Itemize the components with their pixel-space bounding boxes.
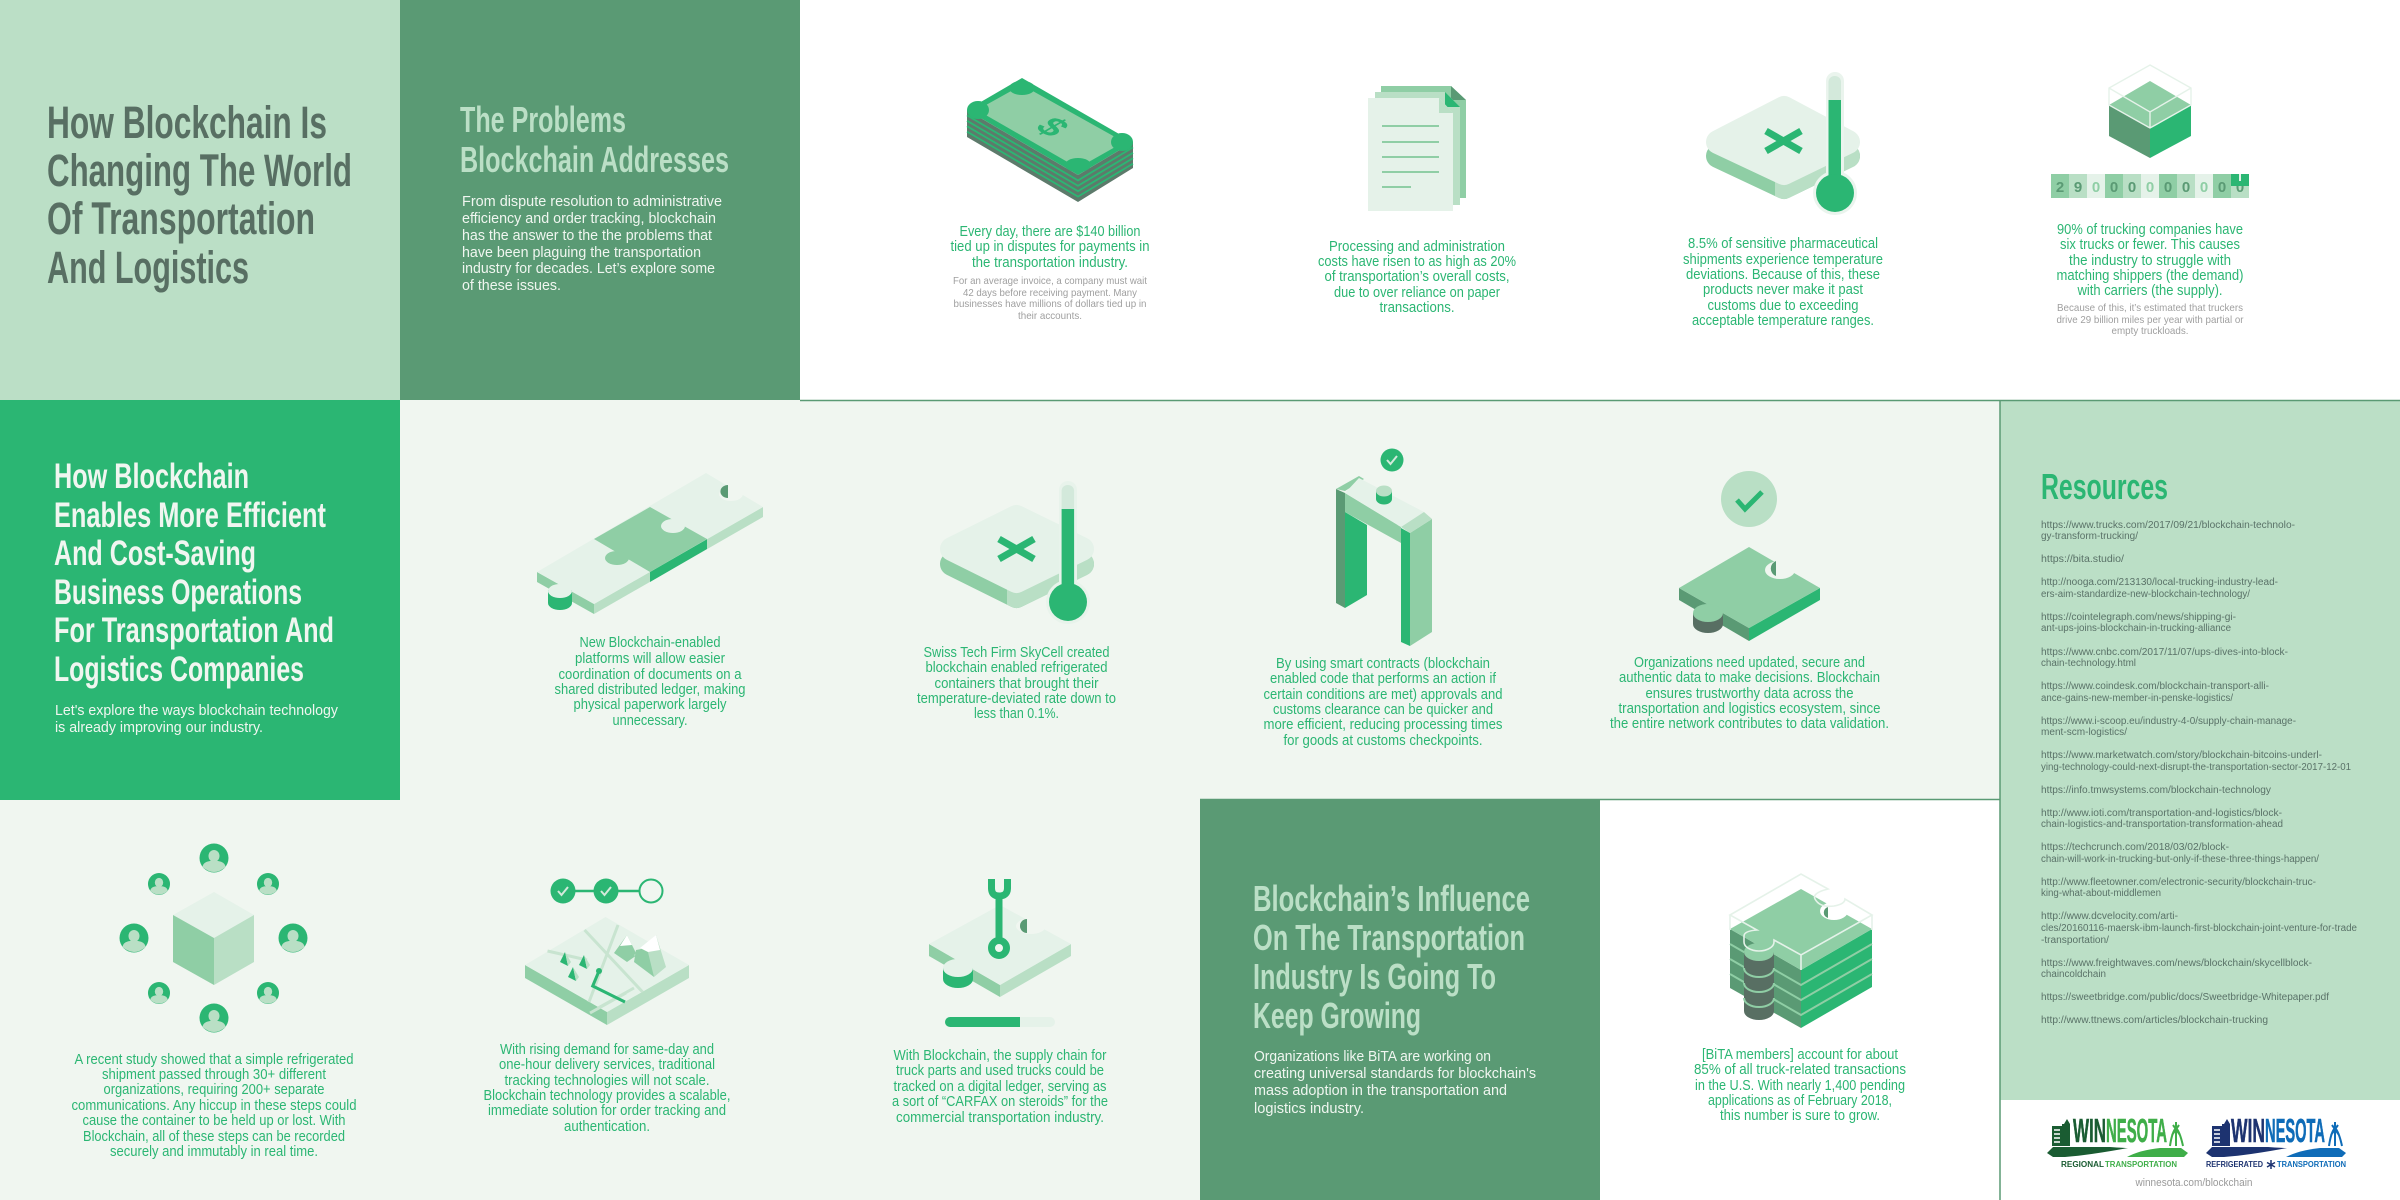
heading: how blockchain enables bbox=[54, 457, 334, 689]
logo: winnesota refrigerated transportation bbox=[2206, 1112, 2346, 1169]
text: explore the ways: is already improving our industry. bbox=[55, 719, 263, 736]
text: small trucking companies: empty truckloads. bbox=[2112, 325, 2188, 337]
text: problems intro bbox=[462, 193, 722, 294]
text: pharmaceutical shipments: customs due to exceeding bbox=[1708, 298, 1858, 314]
icon: delivery map with progress steps bbox=[525, 878, 689, 1025]
icon: thermometer on rejected tile bbox=[1718, 72, 1857, 215]
icon: cube surrounded by people bbox=[120, 844, 308, 1032]
text: carfax on steroids: a sort of “CARFAX on steroids” for the bbox=[892, 1094, 1108, 1110]
text: disputes: 42 days before receiving payment. Many bbox=[963, 287, 1138, 299]
icon: mile counter: 0 bbox=[2182, 179, 2190, 196]
list: resource links: ers-aim-standardize-new-blockchain-technology/ bbox=[2041, 589, 2250, 600]
list: resource links: ment-scm-logistics/ bbox=[2041, 727, 2127, 738]
logo: winnesota regional transportation: NESOTA bbox=[2106, 1112, 2167, 1149]
text: shared ledger: unnecessary. bbox=[612, 713, 688, 729]
text: carfax on steroids: truck parts and used trucks could be bbox=[896, 1063, 1104, 1079]
text: skycell: Swiss Tech Firm SkyCell created bbox=[924, 645, 1110, 661]
list: resource links: https://sweetbridge.com/public/docs/Sweetbridge-Whitepaper.pdf bbox=[2041, 992, 2329, 1003]
text: disputes: their accounts. bbox=[1018, 310, 1082, 322]
text: smart contracts: more efficient, reducing processing times bbox=[1264, 717, 1502, 733]
heading: influence: Keep Growing bbox=[1253, 995, 1421, 1036]
text: problems intro: have been plaguing the transportation bbox=[462, 244, 701, 261]
icon: mile counter: 0 bbox=[2146, 179, 2154, 196]
text: bita members: this number is sure to grow. bbox=[1720, 1108, 1880, 1124]
text: refrigerated shipment study: cause the container to be held up or lost. With bbox=[82, 1113, 346, 1129]
icon: customs gate with check bbox=[1336, 448, 1432, 646]
text: problems intro: efficiency and order tracking, blockchain bbox=[462, 210, 716, 227]
heading: influence: Blockchain’s Influence bbox=[1253, 878, 1530, 919]
text: trustworthy data: ensures trustworthy data across the bbox=[1646, 686, 1854, 702]
text: bita members: in the U.S. With nearly 1,400 pending bbox=[1695, 1078, 1905, 1094]
text: paper costs: costs have risen to as high as 20% bbox=[1318, 254, 1516, 270]
list: resource links: ance-gains-new-member-in-penske-logistics/ bbox=[2041, 693, 2233, 704]
icon: mile counter: 0 bbox=[2200, 179, 2208, 196]
text: smart contracts: enabled code that performs an action if bbox=[1270, 671, 1497, 687]
text: paper costs: of transportation’s overall costs, bbox=[1324, 269, 1510, 285]
title: Of Transportation bbox=[47, 193, 315, 244]
text: influence body: creating universal standards for blockchain's bbox=[1254, 1065, 1536, 1082]
text: disputes: the transportation industry. bbox=[972, 255, 1128, 271]
text: delivery tracking: immediate solution for order tracking and bbox=[488, 1103, 726, 1119]
text: pharmaceutical shipments: deviations. Because of this, these bbox=[1686, 267, 1880, 283]
list: resource links: https://www.trucks.com/2017/09/21/blockchain-technolo- bbox=[2041, 520, 2295, 531]
heading: how blockchain enables: For Transportation And bbox=[54, 611, 334, 650]
panel: the problems intro bbox=[400, 0, 800, 400]
text: trustworthy data: authentic data to make decisions. Blockchain bbox=[1619, 670, 1880, 686]
icon: mile counter: 0 bbox=[2092, 179, 2100, 196]
text: disputes: tied up in disputes for payments in bbox=[950, 239, 1150, 255]
icon: stack of money: $ bbox=[1026, 112, 1079, 142]
text: trustworthy data: Organizations need updated, secure and bbox=[1634, 655, 1865, 671]
text: skycell: temperature-deviated rate down to bbox=[917, 691, 1116, 707]
text: trustworthy data bbox=[1610, 655, 1889, 732]
list: resource links: cles/20160116-maersk-ibm-launch-first-blockchain-joint-venture-for-trade bbox=[2041, 923, 2357, 934]
list: resource links: http://www.ioti.com/transportation-and-logistics/block- bbox=[2041, 808, 2282, 819]
text: explore the ways: Let's explore the ways blockchain technology bbox=[55, 702, 338, 719]
list: resource links: http://www.ttnews.com/articles/blockchain-trucking bbox=[2041, 1015, 2268, 1026]
icon: mile counter: 2 bbox=[2056, 179, 2064, 196]
text: delivery tracking: one-hour delivery services, traditional bbox=[499, 1057, 715, 1073]
list: resource links bbox=[2041, 520, 2357, 1026]
icon: three-piece puzzle strip bbox=[537, 473, 763, 614]
text: skycell: blockchain enabled refrigerated bbox=[926, 660, 1108, 676]
text: website url: winnesota.com/blockchain bbox=[2135, 1177, 2252, 1189]
text: delivery tracking: Blockchain technology provides a scalable, bbox=[484, 1088, 730, 1104]
text: smart contracts: customs clearance can be quicker and bbox=[1273, 702, 1493, 718]
logo: winnesota regional transportation: TRANSPORTATION bbox=[2105, 1160, 2177, 1169]
list: resource links: chain-technology.html bbox=[2041, 658, 2136, 669]
text: paper costs bbox=[1318, 239, 1516, 316]
text: pharmaceutical shipments: acceptable temperature ranges. bbox=[1692, 313, 1874, 329]
text: trustworthy data: transportation and logistics ecosystem, since bbox=[1618, 701, 1880, 717]
heading: influence: On The Transportation bbox=[1253, 917, 1525, 958]
text: skycell: containers that brought their bbox=[934, 676, 1099, 692]
text: carfax on steroids bbox=[892, 1048, 1108, 1126]
text: delivery tracking: authentication. bbox=[564, 1119, 650, 1135]
list: resource links: ying-technology-could-next-disrupt-the-transportation-sector-2017-12-01 bbox=[2041, 762, 2351, 773]
heading: the problems: Blockchain Addresses bbox=[460, 139, 729, 180]
list: resource links: http://www.fleetowner.com/electronic-security/blockchain-truc- bbox=[2041, 877, 2316, 888]
title: Changing The World bbox=[47, 145, 352, 196]
icon: stacked puzzle layers bbox=[1730, 874, 1872, 1028]
text: shared ledger: shared distributed ledger, making bbox=[554, 682, 746, 698]
heading: how blockchain enables: How Blockchain bbox=[54, 457, 249, 496]
title bbox=[47, 97, 352, 293]
list: resource links: https://info.tmwsystems.com/blockchain-technology bbox=[2041, 785, 2271, 796]
list: resource links: chain-will-work-in-trucking-but-only-if-these-three-things-happen/ bbox=[2041, 854, 2319, 865]
text: influence body: mass adoption in the transportation and bbox=[1254, 1082, 1507, 1099]
text: pharmaceutical shipments: shipments experience temperature bbox=[1683, 252, 1883, 268]
text: carfax on steroids: With Blockchain, the supply chain for bbox=[894, 1048, 1107, 1064]
text: disputes: Every day, there are $140 billion bbox=[960, 224, 1140, 240]
panel: influence bbox=[1200, 800, 1600, 1200]
text: delivery tracking bbox=[484, 1042, 730, 1135]
text: influence body: Organizations like BiTA are working on bbox=[1254, 1048, 1491, 1065]
text: shared ledger: physical paperwork largely bbox=[574, 697, 727, 713]
list: resource links: ant-ups-joins-blockchain-in-trucking-alliance bbox=[2041, 623, 2231, 634]
text: pharmaceutical shipments: products never make it past bbox=[1703, 282, 1863, 298]
text: shared ledger bbox=[554, 635, 746, 729]
icon: thermometer on tile bbox=[952, 481, 1090, 624]
logo: winnesota refrigerated transportation: NESOTA bbox=[2265, 1112, 2325, 1149]
text: paper costs: transactions. bbox=[1380, 300, 1454, 316]
list: resource links: gy-transform-trucking/ bbox=[2041, 531, 2138, 542]
title: And Logistics bbox=[47, 242, 249, 293]
text: smart contracts: By using smart contracts (blockchain bbox=[1276, 656, 1490, 672]
heading: the problems: The Problems bbox=[460, 99, 626, 140]
icon: mile counter: 0 bbox=[2164, 179, 2172, 196]
list: resource links: https://www.marketwatch.com/story/blockchain-bitcoins-underl- bbox=[2041, 750, 2322, 761]
text: shared ledger: coordination of documents on a bbox=[558, 667, 742, 683]
text: small trucking companies bbox=[2056, 222, 2244, 337]
text: refrigerated shipment study: communications. Any hiccup in these steps could bbox=[72, 1098, 356, 1114]
icon: mile counter: 0 bbox=[2218, 179, 2226, 196]
list: resource links: http://nooga.com/213130/local-trucking-industry-lead- bbox=[2041, 577, 2278, 588]
text: small trucking companies: six trucks or fewer. This causes bbox=[2060, 237, 2240, 253]
heading: how blockchain enables: And Cost-Saving bbox=[54, 534, 256, 573]
list: resource links: https://techcrunch.com/2018/03/02/block- bbox=[2041, 842, 2229, 853]
icon: mile counter: 0 bbox=[2128, 179, 2136, 196]
panel: resources bbox=[2000, 400, 2400, 1100]
list: resource links: http://www.dcvelocity.com/arti- bbox=[2041, 911, 2178, 922]
heading: how blockchain enables: Enables More Efficient bbox=[54, 496, 326, 535]
heading: influence bbox=[1253, 878, 1530, 1036]
text: refrigerated shipment study: organizations, requiring 200+ separate bbox=[104, 1082, 324, 1098]
icon: mile counter bbox=[2051, 174, 2249, 198]
text: shared ledger: platforms will allow easier bbox=[575, 651, 725, 667]
text: trustworthy data: the entire network contributes to data validation. bbox=[1610, 716, 1889, 732]
heading: the problems bbox=[460, 99, 729, 180]
text: disputes bbox=[950, 224, 1150, 322]
text: disputes: businesses have millions of dollars tied up in bbox=[954, 298, 1147, 310]
text: shared ledger: New Blockchain-enabled bbox=[580, 635, 720, 651]
icon: mile counter: 0 bbox=[2236, 179, 2244, 196]
text: small trucking companies: 90% of trucking companies have bbox=[2057, 222, 2243, 238]
logo: winnesota regional transportation bbox=[2047, 1112, 2188, 1169]
icon: puzzle piece with check bbox=[1679, 471, 1820, 641]
text: problems intro: has the answer to the the problems that bbox=[462, 227, 713, 244]
panel: main title bbox=[0, 0, 400, 400]
list: resource links: https://bita.studio/ bbox=[2041, 554, 2124, 565]
list: resource links: king-what-about-middlemen bbox=[2041, 888, 2161, 899]
text: refrigerated shipment study: Blockchain, all of these steps can be recorded bbox=[83, 1129, 345, 1145]
text: smart contracts: certain conditions are met) approvals and bbox=[1264, 687, 1502, 703]
logo: winnesota regional transportation: REGIONAL bbox=[2061, 1160, 2104, 1169]
text: bita members: [BiTA members] account for about bbox=[1702, 1047, 1898, 1063]
text: influence body: logistics industry. bbox=[1254, 1100, 1364, 1117]
list: resource links: https://www.cnbc.com/2017/11/07/ups-dives-into-block- bbox=[2041, 647, 2288, 658]
text: small trucking companies: drive 29 billion miles per year with partial or bbox=[2056, 314, 2244, 326]
list: resource links: -transportation/ bbox=[2041, 935, 2109, 946]
list: resource links: https://www.i-scoop.eu/industry-4-0/supply-chain-manage- bbox=[2041, 716, 2296, 727]
list: resource links: https://cointelegraph.com/news/shipping-gi- bbox=[2041, 612, 2236, 623]
text: problems intro: of these issues. bbox=[462, 277, 561, 294]
text: delivery tracking: With rising demand for same-day and bbox=[500, 1042, 714, 1058]
icon: mile counter: 0 bbox=[2110, 179, 2118, 196]
logo: winnesota refrigerated transportation: TRANSPORTATION bbox=[2277, 1160, 2346, 1169]
icon: partly filled cube bbox=[2109, 65, 2191, 158]
text: paper costs: due to over reliance on paper bbox=[1334, 285, 1500, 301]
heading: resources: Resources bbox=[2041, 466, 2168, 507]
text: problems intro: industry for decades. Let’s explore some bbox=[462, 260, 715, 277]
list: resource links: chain-logistics-and-transportation-transformation-ahead bbox=[2041, 819, 2283, 830]
list: resource links: chaincoldchain bbox=[2041, 969, 2106, 980]
icon: stack of money bbox=[967, 78, 1133, 202]
text: skycell: less than 0.1%. bbox=[974, 706, 1059, 722]
logo: winnesota refrigerated transportation: REFRIGERATED bbox=[2206, 1160, 2263, 1169]
text: small trucking companies: matching shippers (the demand) bbox=[2056, 268, 2244, 284]
text: bita members: 85% of all truck-related transactions bbox=[1694, 1062, 1906, 1078]
text: small trucking companies: with carriers (the supply). bbox=[2077, 283, 2222, 299]
logo: winnesota regional transportation: WIN bbox=[2073, 1112, 2106, 1149]
text: smart contracts bbox=[1264, 656, 1502, 749]
text: refrigerated shipment study: A recent study showed that a simple refrigerated bbox=[74, 1052, 354, 1068]
text: pharmaceutical shipments: 8.5% of sensitive pharmaceutical bbox=[1688, 236, 1878, 252]
title: How Blockchain Is bbox=[47, 97, 327, 148]
text: problems intro: From dispute resolution to administrative bbox=[462, 193, 722, 210]
text: explore the ways bbox=[55, 702, 338, 736]
text: bita members: applications as of February 2018, bbox=[1708, 1093, 1892, 1109]
logo: winnesota refrigerated transportation: WIN bbox=[2231, 1112, 2265, 1149]
text: refrigerated shipment study bbox=[72, 1052, 356, 1160]
text: small trucking companies: Because of this, it’s estimated that truckers bbox=[2057, 302, 2243, 314]
list: resource links: https://www.coindesk.com/blockchain-transport-alli- bbox=[2041, 681, 2269, 692]
text: refrigerated shipment study: securely and immutably in real time. bbox=[110, 1144, 318, 1160]
heading: how blockchain enables: Logistics Companies bbox=[54, 650, 304, 689]
text: carfax on steroids: commercial transportation industry. bbox=[896, 1110, 1104, 1126]
text: paper costs: Processing and administration bbox=[1329, 239, 1505, 255]
text: skycell bbox=[917, 645, 1116, 722]
text: carfax on steroids: tracked on a digital ledger, serving as bbox=[894, 1079, 1106, 1095]
text: disputes: For an average invoice, a company must wait bbox=[953, 275, 1147, 287]
text: small trucking companies: the industry to struggle with bbox=[2069, 253, 2231, 269]
heading: influence: Industry Is Going To bbox=[1253, 956, 1496, 997]
text: pharmaceutical shipments bbox=[1683, 236, 1883, 329]
text: bita members bbox=[1694, 1047, 1906, 1124]
text: smart contracts: for goods at customs checkpoints. bbox=[1284, 733, 1482, 749]
text: refrigerated shipment study: shipment passed through 30+ different bbox=[102, 1067, 326, 1083]
heading: how blockchain enables: Business Operations bbox=[54, 573, 302, 612]
text: influence body bbox=[1254, 1048, 1536, 1117]
text: delivery tracking: tracking technologies will not scale. bbox=[504, 1073, 710, 1089]
icon: mile counter: 9 bbox=[2074, 179, 2082, 196]
list: resource links: https://www.freightwaves.com/news/blockchain/skycellblock- bbox=[2041, 958, 2312, 969]
panel: efficient operations intro bbox=[0, 400, 400, 800]
icon: paper documents bbox=[1368, 86, 1466, 211]
icon: wrench on puzzle piece with progress bar bbox=[929, 879, 1071, 1027]
